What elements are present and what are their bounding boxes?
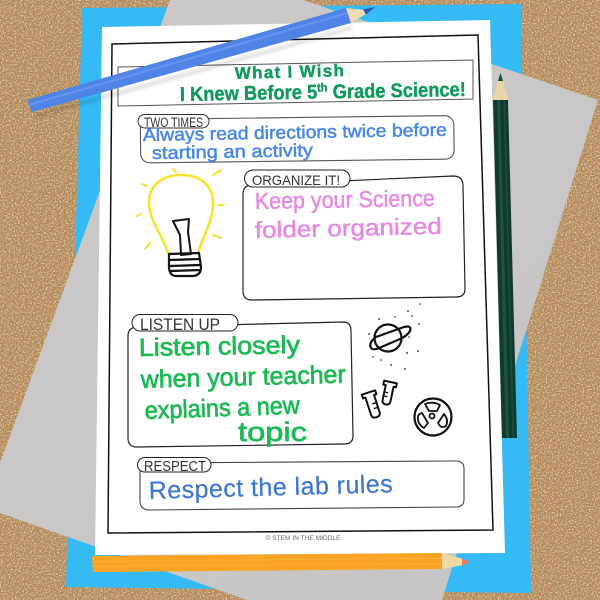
label pill: respect: RESPECT	[144, 459, 206, 475]
pencil body	[27, 8, 351, 112]
icon: radiation symbol	[414, 398, 452, 436]
icon: light bulb	[137, 169, 224, 276]
worksheet outer frame	[108, 35, 493, 533]
pencil wood tip	[442, 553, 463, 569]
pencil wood tip	[493, 80, 508, 100]
bulb base	[169, 253, 201, 276]
bulb rays	[137, 169, 224, 249]
label pill: listen up: LISTEN UP	[140, 315, 220, 334]
panel: two times	[138, 114, 454, 163]
stars	[368, 303, 421, 370]
bulb filament	[173, 219, 191, 255]
handwritten tip: organize	[255, 185, 442, 243]
blue pencil	[27, 7, 375, 118]
handwritten tip: listen	[139, 331, 346, 447]
worksheet sheet	[95, 20, 505, 555]
icon: test tubes	[362, 381, 397, 419]
handwritten tip: two times: starting an activity	[152, 140, 313, 163]
pencil lead	[498, 73, 503, 81]
orange pencil	[92, 553, 470, 572]
title text	[180, 61, 466, 106]
handwritten tip: organize: Keep your Science	[255, 185, 435, 214]
title text: th	[317, 80, 328, 95]
label pill: organize it: ORGANIZE IT!	[252, 172, 340, 188]
pencil wood tip	[346, 8, 366, 23]
title text: Grade Science!	[327, 79, 466, 103]
panel: respect	[138, 458, 464, 510]
handwritten tip: listen: explains a new	[144, 392, 301, 425]
panel: organize it	[243, 170, 465, 300]
handwritten tip: listen: when your teacher	[139, 361, 346, 394]
pencil body	[92, 553, 442, 572]
handwritten tip: listen: topic	[238, 417, 307, 447]
title text: I Knew Before 5	[180, 81, 330, 106]
pencil lead	[363, 7, 375, 14]
pencil body	[493, 100, 517, 438]
handwritten tip: two times	[143, 120, 447, 163]
blue construction paper	[66, 4, 531, 593]
handwritten tip: two times: Always read directions twice before	[143, 120, 447, 145]
handwritten tip: organize: folder organized	[255, 213, 442, 243]
handwritten tip: respect: Respect the lab rules	[148, 470, 393, 505]
label pill: two times: TWO TIMES	[144, 115, 203, 130]
icon: planet with stars	[368, 303, 421, 370]
copyright footer: © STEM IN THE MIDDLE	[266, 534, 340, 542]
pencil shadow	[35, 26, 352, 118]
green pencil	[493, 73, 517, 438]
pencil lead	[462, 558, 470, 566]
title box	[118, 60, 473, 106]
title text: What I Wish	[235, 61, 344, 83]
panel: listen up	[128, 314, 353, 447]
handwritten tip: listen: Listen closely	[139, 331, 301, 362]
